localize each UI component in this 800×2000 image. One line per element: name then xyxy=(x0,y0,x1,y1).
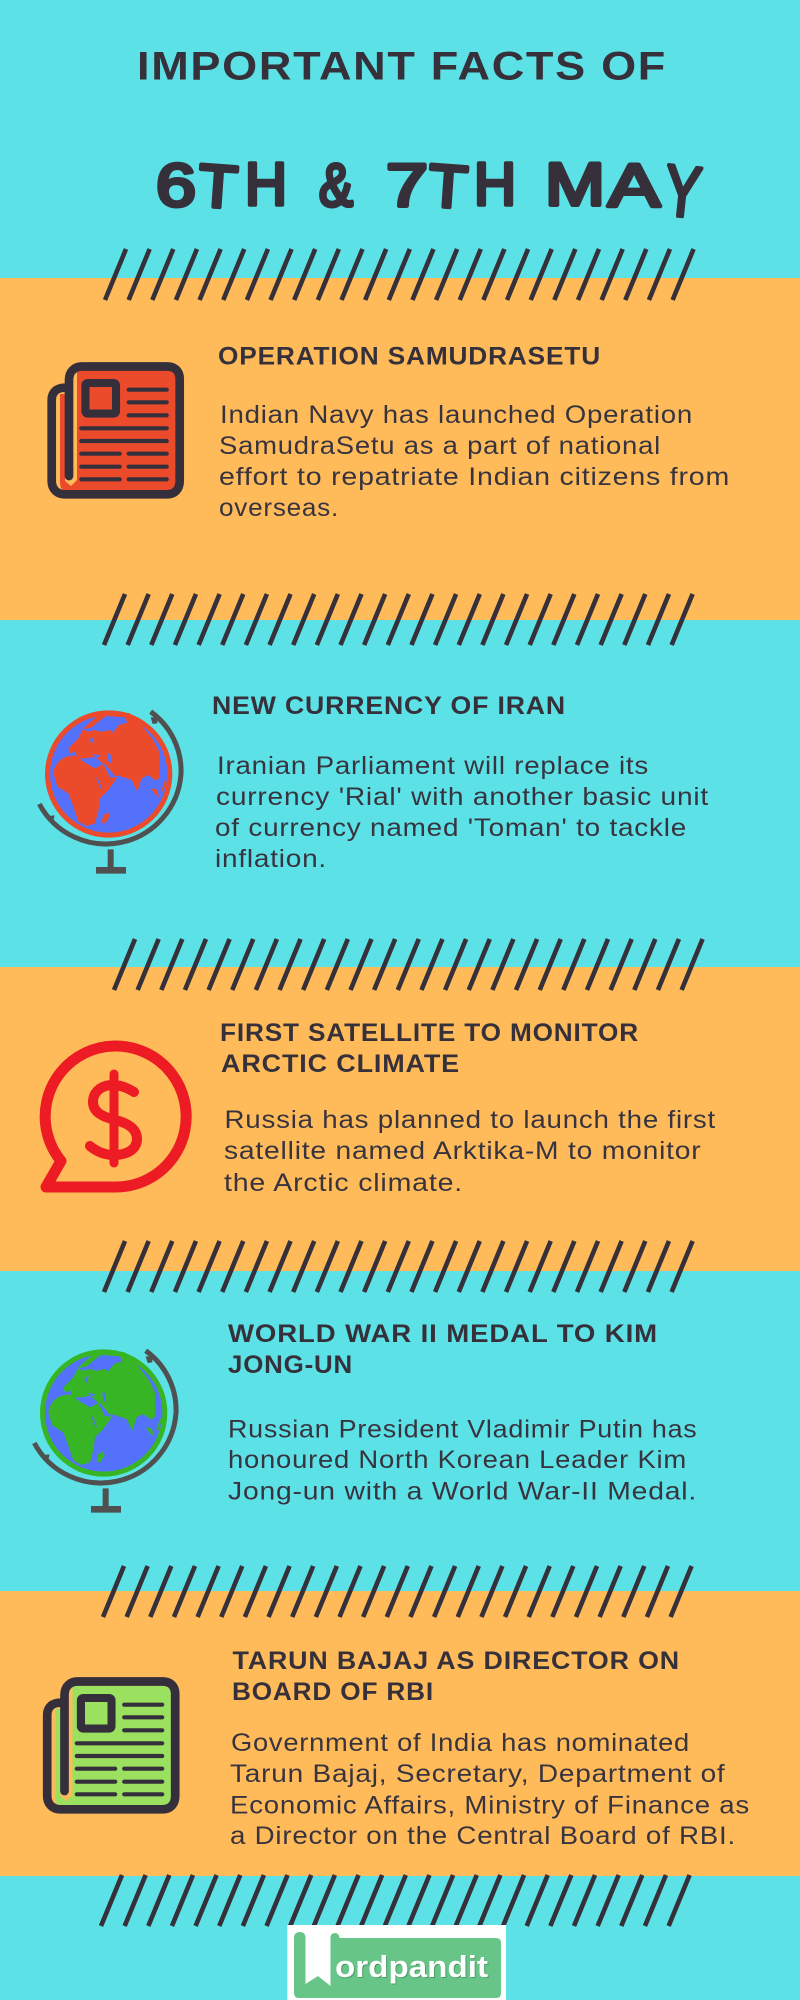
body: overseas. xyxy=(219,494,339,522)
title: date: Y xyxy=(660,150,705,234)
icon: dollar speech bubble xyxy=(45,1046,186,1187)
title: date xyxy=(156,150,705,234)
panel: tarun bajaj background xyxy=(0,1591,800,1876)
heading: TARUN BAJAJ AS DIRECTOR ON xyxy=(232,1647,680,1675)
title: date: 6 xyxy=(156,152,196,219)
icon: red newspaper xyxy=(52,366,180,494)
body: satellite named Arktika-M to monitor xyxy=(224,1137,702,1165)
body: honoured North Korean Leader Kim xyxy=(228,1446,687,1474)
heading: WORLD WAR II MEDAL TO KIM xyxy=(228,1320,658,1348)
body xyxy=(219,401,730,522)
panel: operation samudrasetu background xyxy=(0,278,800,620)
heading: FIRST SATELLITE TO MONITOR xyxy=(220,1019,639,1047)
body xyxy=(215,752,709,873)
body: effort to repatriate Indian citizens from xyxy=(219,463,730,491)
title: date: 7 xyxy=(386,152,428,219)
logo: wordpandit: ordpandit xyxy=(335,1949,488,1984)
title: date: M xyxy=(545,151,605,218)
body: Russian President Vladimir Putin has xyxy=(228,1416,698,1444)
text: tarun bajaj xyxy=(230,1647,750,1850)
icon: red globe xyxy=(39,710,181,874)
icon: green globe xyxy=(34,1349,176,1513)
body: Iranian Parliament will replace its xyxy=(217,752,649,780)
body: Tarun Bajaj, Secretary, Department of xyxy=(230,1760,726,1788)
body: Russia has planned to launch the first xyxy=(224,1106,716,1134)
heading xyxy=(232,1647,680,1706)
body: SamudraSetu as a part of national xyxy=(219,432,661,460)
heading: BOARD OF RBI xyxy=(232,1678,434,1706)
body: Indian Navy has launched Operation xyxy=(220,401,693,429)
text: first satellite xyxy=(220,1019,716,1197)
panel: world war medal background xyxy=(0,1271,800,1591)
panel: header background xyxy=(0,0,800,278)
title: date: H xyxy=(245,151,287,218)
title: date: & xyxy=(319,152,353,219)
title: date: T xyxy=(196,152,240,221)
heading xyxy=(220,1019,639,1078)
logo: wordpandit: ordpandit xyxy=(336,1950,489,1985)
heading: OPERATION SAMUDRASETU xyxy=(218,342,601,370)
title: date: T xyxy=(426,152,470,221)
panel: footer background xyxy=(0,1876,800,2000)
body xyxy=(224,1106,716,1197)
body: a Director on the Central Board of RBI. xyxy=(230,1822,736,1850)
heading: NEW CURRENCY OF IRAN xyxy=(212,692,566,720)
body: Government of India has nominated xyxy=(231,1729,690,1757)
panel: new currency of iran background xyxy=(0,620,800,967)
heading: ARCTIC CLIMATE xyxy=(221,1050,460,1078)
logo: wordpandit xyxy=(287,1925,506,2000)
text: operation samudrasetu xyxy=(218,342,730,522)
heading: JONG-UN xyxy=(228,1351,353,1379)
panel: first satellite background xyxy=(0,967,800,1271)
text: new currency of iran xyxy=(212,692,709,873)
body: Economic Affairs, Ministry of Finance as xyxy=(230,1792,750,1820)
text: world war medal xyxy=(228,1320,698,1506)
body xyxy=(228,1416,698,1506)
body: of currency named 'Toman' to tackle xyxy=(215,814,687,842)
title: important facts of: IMPORTANT FACTS OF xyxy=(137,44,667,88)
body xyxy=(230,1729,750,1850)
icon: green newspaper xyxy=(47,1682,175,1809)
body: the Arctic climate. xyxy=(224,1169,463,1197)
body: Jong-un with a World War-II Medal. xyxy=(228,1478,697,1506)
body: inflation. xyxy=(215,845,327,873)
body: currency 'Rial' with another basic unit xyxy=(216,783,709,811)
heading xyxy=(228,1320,658,1379)
title: date: A xyxy=(608,152,660,219)
title: date: H xyxy=(474,151,516,218)
